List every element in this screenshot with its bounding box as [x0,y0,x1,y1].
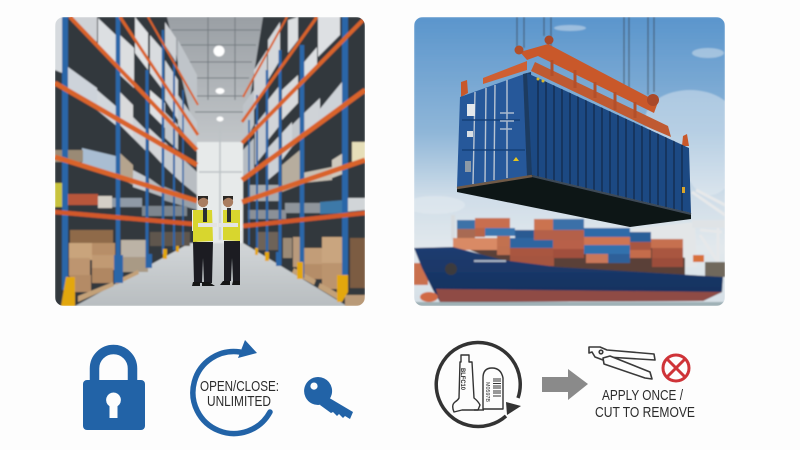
label: apply once, cut to remove [595,387,695,421]
left worker [192,196,217,286]
icon: circular arrow [193,340,270,434]
container stacks [414,218,685,285]
label: open/close unlimited [200,378,279,410]
icon: red prohibited cross [663,355,689,381]
ship hull [414,247,723,302]
label: apply once, cut to remove: CUT TO REMOVE [595,404,695,421]
label: open/close unlimited: OPEN/CLOSE: [200,378,279,395]
panel: warehouse photo [55,17,365,306]
right shelf uprights [249,17,345,290]
label: open/close unlimited: UNLIMITED [207,393,271,410]
mast [452,216,454,240]
left shelf beams [55,17,198,224]
panel: container ship photo [405,17,735,306]
icon: padlock [83,350,145,430]
warehouse ceiling [167,17,263,142]
ship superstructure [662,223,692,227]
icon: cutting pliers [589,347,655,379]
clouds [405,25,735,214]
crane cables [517,17,654,95]
bolt seal outline [453,355,503,412]
container end doors [457,72,535,187]
right shelf beams [242,17,365,226]
blue rack feet [114,252,281,283]
dock crane [691,189,725,236]
left shelving goods [55,17,197,216]
icon: seal in circular arrow [436,342,521,426]
container underside [457,175,691,227]
right shelving cartons [258,232,365,306]
spreader frame [461,36,689,146]
left shelving cartons [69,230,190,302]
seal barcode [493,379,501,396]
container corrugated side [527,70,691,220]
warehouse floor [75,243,347,306]
left shelf uprights [65,17,183,290]
icon: seal in circular arrow: M0597B [484,382,490,403]
arrow: grey process arrow [542,369,588,400]
right worker [218,196,242,285]
icon: key [304,377,353,419]
label: apply once, cut to remove: APPLY ONCE / [602,387,684,404]
right shelving goods [243,17,365,219]
icon: seal in circular arrow: BLFC10 [459,368,466,390]
yellow rack guards [61,246,348,306]
ceiling lights [214,46,224,122]
